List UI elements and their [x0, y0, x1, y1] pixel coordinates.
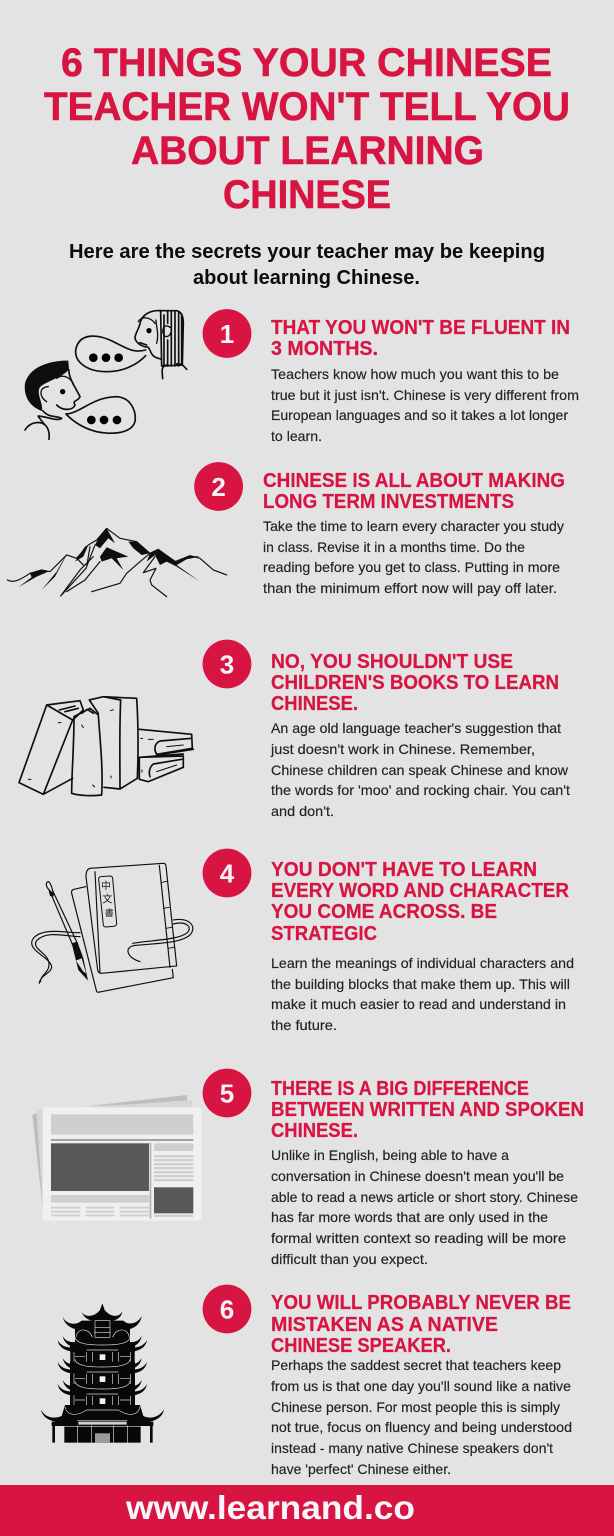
icon: Chinese book and brush: 中	[101, 877, 111, 892]
heading 2	[263, 469, 565, 513]
heading 4: YOU DON'T HAVE TO LEARN	[271, 858, 537, 881]
title: TEACHER WON'T TELL YOU	[44, 85, 570, 129]
number badge 6: 6	[220, 1294, 234, 1324]
body text 4: make it much easier to read and understand in	[271, 997, 566, 1012]
body text 5: Unlike in English, being able to have a	[271, 1148, 509, 1163]
icon: Chinese pagoda tower	[41, 1303, 164, 1443]
heading 4	[271, 858, 569, 945]
body text 3: the words for 'moo' and rocking chair. You can't	[271, 783, 570, 798]
body text 6: have 'perfect' Chinese either.	[271, 1462, 451, 1477]
number badge 6	[203, 1285, 251, 1333]
icon: stack of books	[19, 697, 193, 796]
panel: secret 3	[19, 640, 570, 819]
heading 5	[271, 1077, 584, 1142]
panel: secret 4	[32, 849, 574, 1033]
footer banner: www.learnand.co	[125, 1489, 415, 1526]
body text 4	[271, 956, 574, 1033]
icon: Chinese book and brush: 書	[105, 905, 114, 919]
body text 3: An age old language teacher's suggestion that	[271, 721, 561, 736]
heading 1: THAT YOU WON'T BE FLUENT IN	[271, 316, 570, 339]
footer banner	[0, 1485, 614, 1536]
panel: secret 1	[25, 309, 579, 444]
body text 5: difficult than you expect.	[271, 1252, 428, 1267]
subtitle	[69, 240, 545, 289]
heading 2: LONG TERM INVESTMENTS	[263, 490, 514, 513]
number badge 1	[203, 309, 251, 358]
panel: secret 5	[32, 1069, 584, 1267]
body text 2: in class. Revise it in a months time. Do the	[263, 540, 525, 555]
title: 6 THINGS YOUR CHINESE	[61, 41, 552, 85]
number badge 2: 2	[211, 472, 226, 502]
number badge 2	[194, 462, 243, 511]
body text 3: and don't.	[271, 804, 334, 819]
panel: secret 2	[7, 462, 565, 597]
body text 2: reading before you get to class. Putting in more	[263, 560, 560, 575]
title	[44, 41, 570, 217]
heading 4: STRATEGIC	[271, 922, 377, 945]
body text 4: the future.	[271, 1018, 337, 1033]
body text 2: Take the time to learn every character you study	[263, 519, 564, 534]
body text 2	[263, 519, 564, 596]
heading 3: CHINESE.	[271, 692, 358, 715]
icon: Chinese book and brush: 文	[102, 891, 112, 906]
heading 3: CHILDREN'S BOOKS TO LEARN	[271, 671, 559, 694]
heading 4: YOU COME ACROSS. BE	[271, 900, 497, 923]
subtitle: Here are the secrets your teacher may be keeping	[69, 240, 545, 263]
body text 4: Learn the meanings of individual characters and	[271, 956, 574, 971]
heading 6	[271, 1291, 571, 1357]
title: CHINESE	[223, 173, 391, 217]
body text 4: the building blocks that make them up. This will	[271, 977, 570, 992]
body text 6	[271, 1358, 572, 1477]
subtitle: about learning Chinese.	[193, 266, 420, 289]
body text 1	[271, 367, 579, 444]
heading 1: 3 MONTHS.	[271, 337, 378, 360]
body text 6: Chinese person. For most people this is simply	[271, 1400, 560, 1415]
heading 3	[271, 650, 559, 715]
heading 4: EVERY WORD AND CHARACTER	[271, 879, 569, 902]
icon: Chinese book and brush	[32, 863, 193, 992]
title: ABOUT LEARNING	[131, 129, 484, 173]
body text 5: conversation in Chinese doesn't mean you'll be	[271, 1169, 564, 1184]
body text 3: just doesn't work in Chinese. Remember,	[270, 742, 535, 757]
number badge 3: 3	[220, 650, 234, 680]
body text 5: able to read a news article or short story. Chinese	[271, 1190, 578, 1205]
body text 6: Perhaps the saddest secret that teachers keep	[271, 1358, 561, 1373]
panel: secret 6	[41, 1285, 572, 1477]
heading 5: BETWEEN WRITTEN AND SPOKEN	[271, 1098, 584, 1121]
icon: mountain range	[7, 528, 227, 597]
body text 1: true but it just isn't. Chinese is very different from	[271, 388, 579, 403]
number badge 5	[203, 1069, 251, 1117]
heading 2: CHINESE IS ALL ABOUT MAKING	[263, 469, 565, 492]
heading 1	[271, 316, 570, 360]
body text 5: has far more words that are only used in the	[271, 1210, 548, 1225]
body text 6: from us is that one day you'll sound like a native	[271, 1379, 571, 1394]
body text 1: Teachers know how much you want this to be	[271, 367, 559, 382]
icon: newspaper	[32, 1095, 202, 1221]
number badge 4: 4	[220, 858, 235, 888]
heading 6: MISTAKEN AS A NATIVE	[271, 1313, 498, 1336]
icon: two people talking	[25, 311, 187, 439]
body text 1: to learn.	[271, 429, 322, 444]
body text 6: not true, focus on fluency and being understood	[271, 1420, 572, 1435]
body text 1: European languages and so it takes a lot longer	[271, 408, 568, 423]
heading 3: NO, YOU SHOULDN'T USE	[271, 650, 513, 673]
heading 6: YOU WILL PROBABLY NEVER BE	[271, 1291, 571, 1314]
heading 5: THERE IS A BIG DIFFERENCE	[271, 1077, 529, 1100]
body text 5: formal written context so reading will be more	[271, 1231, 566, 1246]
number badge 1: 1	[220, 319, 234, 349]
number badge 3	[203, 640, 251, 688]
heading 5: CHINESE.	[271, 1119, 358, 1142]
number badge 4	[203, 849, 251, 897]
body text 2: than the minimum effort now will pay off later.	[263, 581, 557, 596]
body text 3	[270, 721, 570, 819]
body text 6: instead - many native Chinese speakers don't	[271, 1441, 553, 1456]
body text 3: Chinese children can speak Chinese and know	[271, 763, 568, 778]
number badge 5: 5	[220, 1078, 234, 1108]
heading 6: CHINESE SPEAKER.	[271, 1334, 451, 1357]
body text 5	[271, 1148, 578, 1267]
